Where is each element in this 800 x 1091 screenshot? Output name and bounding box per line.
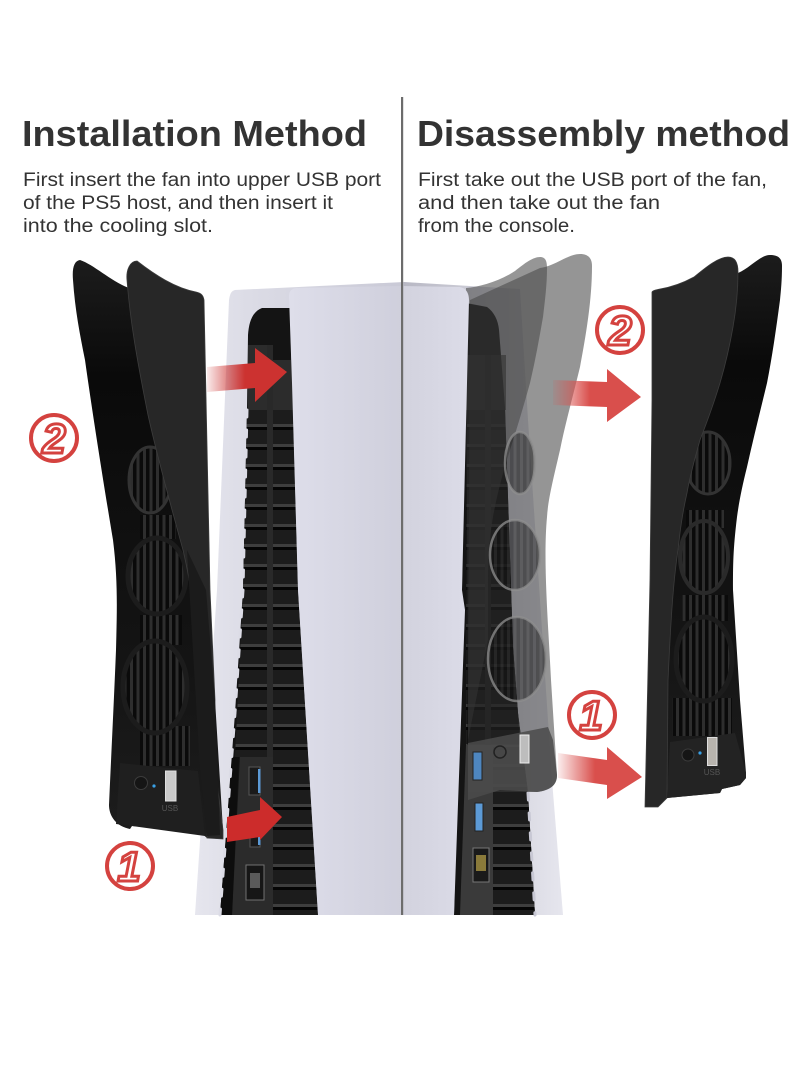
left fan port panel — [116, 763, 205, 836]
step 2 badge right — [597, 307, 643, 354]
arrow: left top — [207, 348, 287, 402]
console left shell — [195, 282, 404, 915]
ghost fan being removed — [466, 254, 592, 800]
ghost USB port — [520, 735, 529, 763]
ethernet port — [473, 848, 489, 882]
left fan vent ribs — [140, 615, 182, 645]
console left vents — [220, 308, 318, 915]
left fan back panel — [73, 260, 223, 839]
arrow: right top — [553, 369, 641, 422]
right fan USB port — [708, 738, 717, 766]
console centre plate left — [289, 286, 402, 915]
left fan front panel — [127, 261, 223, 839]
right fan small ring — [686, 432, 730, 494]
left fan USB label: USB — [162, 804, 178, 813]
console right vents — [454, 303, 535, 915]
centre divider — [401, 97, 403, 915]
text block: installation instructions: into the cooling slot. — [23, 216, 213, 237]
heading: installation method: Installation Method — [22, 113, 367, 154]
ghost fan back — [468, 254, 592, 792]
left fan — [73, 260, 223, 839]
arrow: right bottom — [558, 747, 642, 799]
console right shell — [404, 282, 563, 915]
ghost button — [494, 746, 506, 758]
step 1 badge right — [569, 692, 615, 739]
arrow: left bottom — [227, 797, 282, 842]
USB port blue — [249, 767, 260, 795]
USB ports blue — [473, 752, 482, 780]
ghost vents darkening — [467, 303, 520, 745]
step 2 badge right: 2 — [607, 307, 632, 354]
right fan port panel — [667, 733, 746, 798]
right fan medium ring — [680, 521, 728, 593]
right fan — [645, 255, 782, 807]
left fan USB port — [166, 771, 176, 801]
step 1 badge left: 1 — [117, 843, 141, 890]
step 2 badge left: 2 — [41, 415, 66, 462]
console centre plate right — [402, 286, 469, 915]
text block: installation instructions: First insert the fan into upper USB port — [23, 170, 382, 191]
step 2 badge left — [31, 415, 77, 462]
text block: disassembly instructions: First take out the USB port of the fan, — [418, 170, 767, 191]
right fan USB label: USB — [704, 768, 720, 777]
ethernet port — [246, 865, 264, 900]
left fan button — [134, 776, 148, 790]
right fan back panel — [660, 255, 782, 798]
text block: disassembly instructions — [418, 170, 767, 237]
ghost fan front — [466, 257, 547, 740]
left fan small ring — [129, 447, 171, 513]
left console ports — [246, 767, 264, 900]
right fan LED — [698, 751, 702, 755]
text block: installation instructions — [23, 170, 382, 237]
right fan button — [682, 749, 694, 761]
console: PS5 — [195, 282, 563, 915]
right fan front panel — [645, 257, 738, 807]
ghost fan rings — [488, 432, 546, 701]
heading: disassembly method: Disassembly method — [417, 113, 790, 154]
left fan LED — [152, 784, 156, 788]
step 1 badge right: 1 — [579, 692, 603, 739]
right fan vent ribs — [686, 510, 724, 528]
text block: disassembly instructions: and then take out the fan — [418, 193, 660, 214]
right console ports — [473, 752, 489, 882]
left fan large ring — [123, 641, 187, 733]
text block: installation instructions: of the PS5 host, and then insert it — [23, 193, 334, 214]
step 1 badge left — [107, 843, 153, 890]
right fan large ring — [676, 617, 732, 701]
left fan medium ring — [128, 538, 186, 614]
ghost fan port panel — [468, 727, 557, 800]
text block: disassembly instructions: from the console. — [418, 216, 575, 237]
